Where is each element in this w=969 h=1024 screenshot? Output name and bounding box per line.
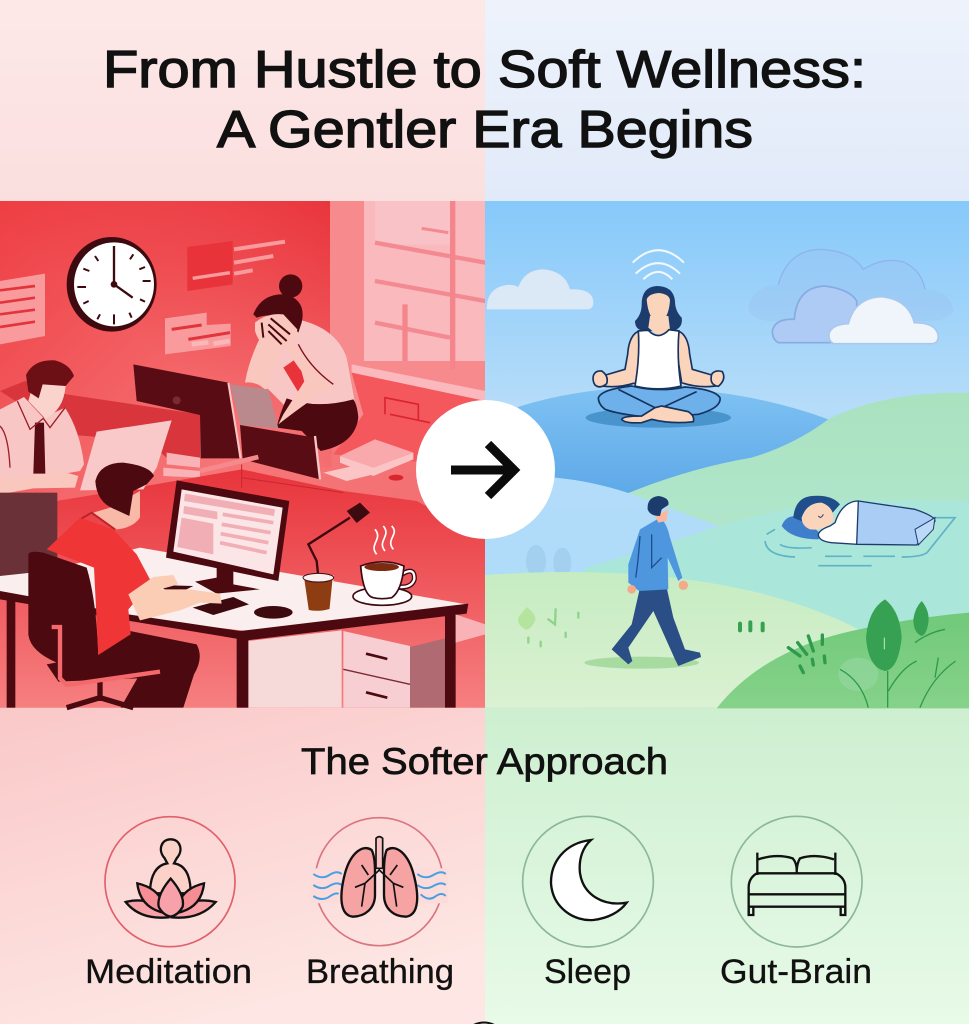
coffee cup: [353, 526, 414, 605]
green plants: [518, 599, 956, 708]
desktop monitor: [166, 480, 289, 594]
man with tie: arm: [0, 470, 78, 494]
green hill: [628, 393, 969, 708]
faint trees: [526, 545, 571, 579]
icon: crescent moon: [523, 816, 653, 947]
approach item: gut-brain: [720, 816, 872, 991]
dark green hill: [717, 613, 969, 708]
poster: [0, 274, 45, 344]
subheading: The Softer Approach: [301, 741, 668, 782]
label: Sleep: Sleep: [544, 953, 631, 991]
lamp: [308, 503, 370, 577]
label: Gut-Brain: Gut-Brain: [720, 953, 872, 991]
arrow badge: [416, 400, 555, 539]
meditating woman: [586, 286, 731, 428]
woman with head in hands: [245, 274, 358, 451]
worker at front desk: [47, 463, 222, 708]
panel: hustle office scene: [0, 201, 485, 708]
title: A Gentler Era Begins: [217, 101, 753, 159]
icon: meditation lotus: [105, 817, 235, 947]
desk: [0, 548, 485, 708]
wall notes: [165, 241, 285, 354]
label: Meditation: Meditation: [85, 953, 252, 991]
monitors and laptops: [133, 364, 320, 479]
icon: lungs: [310, 818, 448, 946]
small cloud: [487, 269, 593, 309]
lower floor: [0, 469, 485, 708]
panel: soft wellness landscape: [485, 201, 969, 708]
grey chair back: [0, 493, 57, 579]
office chair arm: [52, 627, 160, 685]
approach item: sleep: [523, 816, 653, 991]
cubicle divider: [0, 381, 200, 468]
sleeping person: [765, 496, 955, 566]
blue hill: [518, 388, 828, 493]
walking man: [584, 496, 701, 669]
papers on back desk: [323, 398, 430, 481]
title: From Hustle to Soft Wellness:: [103, 41, 866, 99]
teal hill: [585, 500, 969, 708]
window: [352, 201, 485, 401]
back clouds: [748, 249, 953, 344]
iced drink cup: [303, 573, 334, 611]
clock: [67, 237, 157, 332]
laptop of man with tie: [80, 420, 172, 490]
keyboard and mouse: [157, 585, 293, 619]
icon: bed: [731, 816, 862, 947]
sound arcs: [633, 250, 684, 279]
label: Breathing: Breathing: [306, 953, 454, 991]
approach item: breathing: [306, 818, 454, 991]
approach item: meditation: [85, 817, 252, 991]
pale meadow: [485, 572, 862, 708]
background: pink and blue split header: [0, 0, 969, 202]
background: pink and green split footer: [0, 706, 969, 1024]
title: [103, 41, 866, 159]
partial circle at bottom edge: [470, 1022, 498, 1024]
office chair back: [28, 552, 133, 708]
man with tie: [0, 360, 84, 479]
